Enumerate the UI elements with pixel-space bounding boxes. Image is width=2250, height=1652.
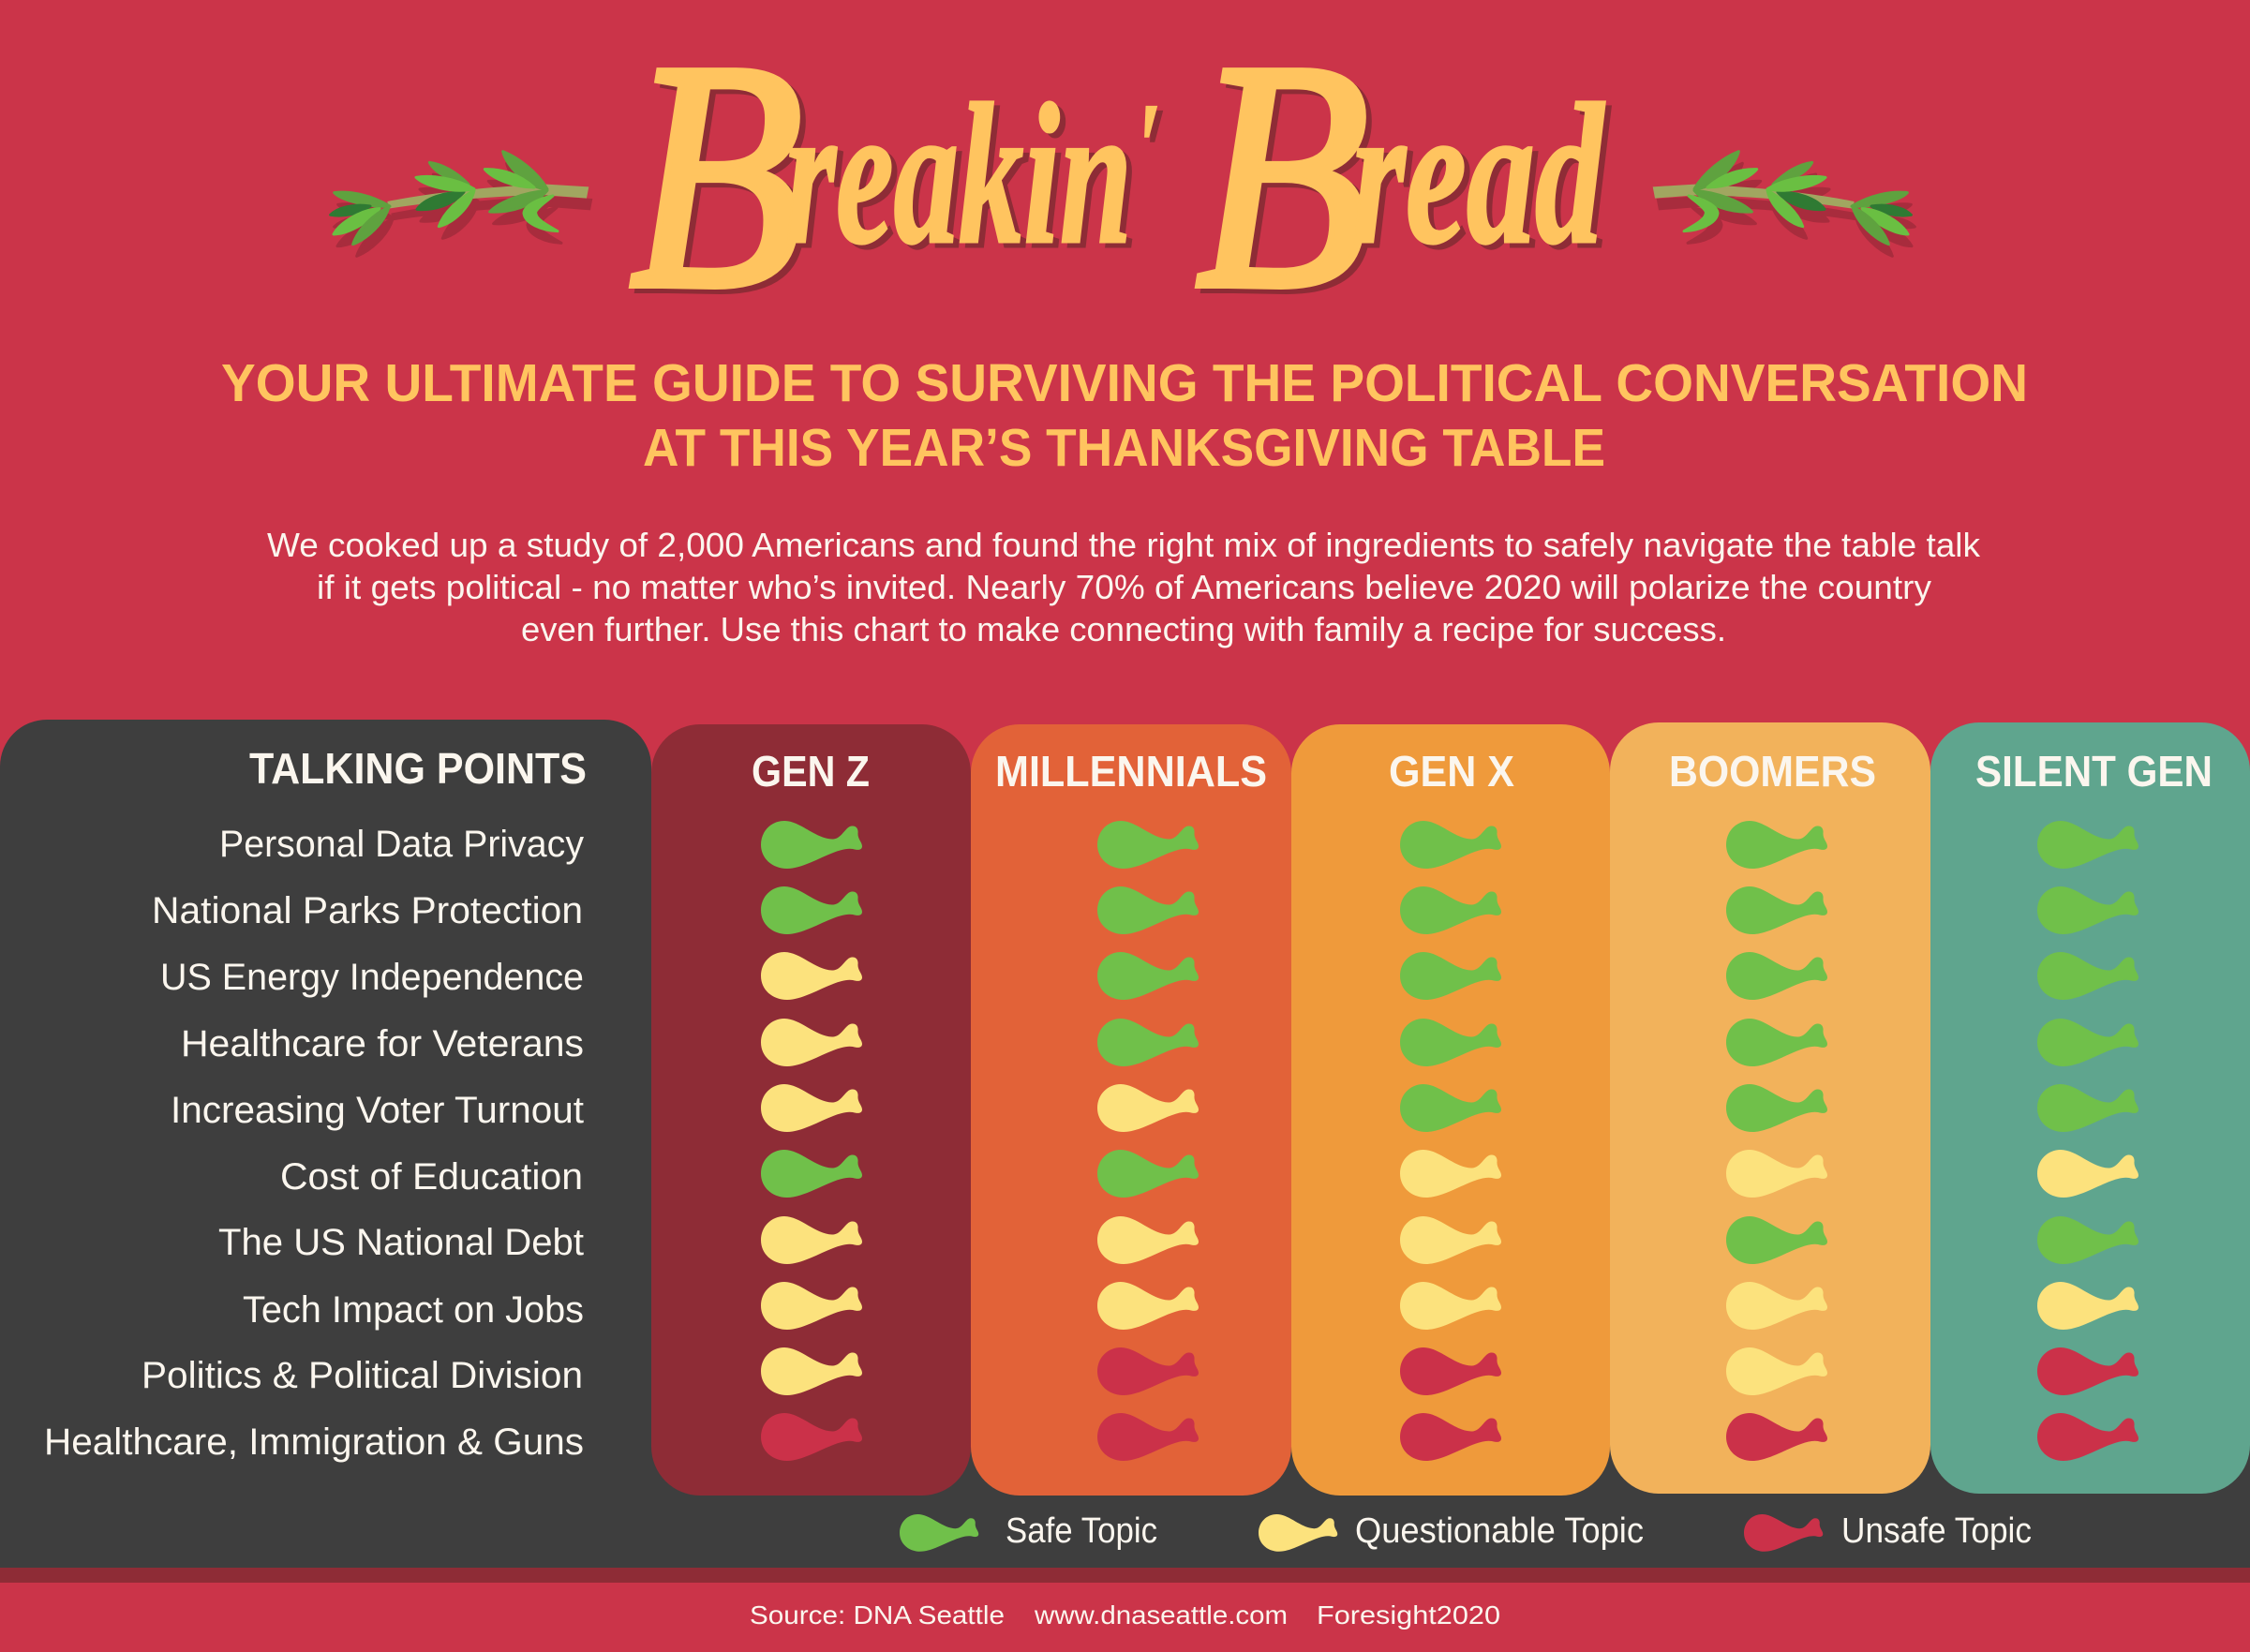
panel: talking points list — [44, 744, 587, 1463]
title: read — [1352, 62, 1605, 286]
heading: Gen X: GEN X — [1389, 747, 1514, 796]
subtitle — [221, 353, 2028, 478]
icon: unsafe topic — [1744, 1514, 1823, 1552]
icons: Gen X ratings — [1400, 821, 1501, 1461]
row label: National Parks Protection — [152, 890, 583, 931]
icons: Boomers ratings — [1726, 821, 1827, 1461]
panel: Boomers column — [1610, 722, 1930, 1494]
heading: Gen Z: GEN Z — [752, 747, 870, 796]
row label: Personal Data Privacy — [219, 824, 584, 865]
footer source line: www.dnaseattle.com — [1034, 1600, 1288, 1630]
title — [630, 0, 1605, 356]
legend label: unsafe: Unsafe Topic — [1841, 1511, 2032, 1551]
title: ' — [1131, 76, 1157, 221]
row label: Cost of Education — [280, 1156, 583, 1198]
icons: Gen Z ratings — [761, 821, 862, 1461]
panel: dark table background — [0, 720, 2250, 1568]
subtitle: AT THIS YEAR’S THANKSGIVING TABLE — [643, 418, 1605, 478]
legend label: questionable: Questionable Topic — [1355, 1511, 1644, 1551]
panel: Gen X column — [1291, 724, 1610, 1496]
icon: questionable topic — [1259, 1514, 1337, 1552]
footer source line: Source: DNA Seattle — [750, 1600, 1005, 1630]
row label: US Energy Independence — [160, 957, 584, 998]
row label: The US National Debt — [218, 1222, 584, 1263]
heading: talking points: TALKING POINTS — [249, 744, 587, 793]
row label: Politics & Political Division — [142, 1355, 583, 1396]
footer band stripe — [0, 1568, 2250, 1583]
legend — [900, 1511, 2032, 1552]
intro text block: even further. Use this chart to make connecting with family a recipe for success. — [521, 610, 1726, 648]
icon: left rosemary sprig — [331, 152, 592, 256]
footer source line: Foresight2020 — [1317, 1600, 1500, 1630]
panel: Gen Z column — [651, 724, 971, 1496]
heading: Millennials: MILLENNIALS — [995, 747, 1267, 796]
title: B — [1196, 0, 1369, 356]
title: reakin — [785, 62, 1132, 286]
title: B — [630, 0, 803, 356]
intro text block: if it gets political - no matter who’s invited. Nearly 70% of Americans believe 2020 will polarize the country — [317, 568, 1931, 606]
panel: Silent Gen column — [1930, 722, 2250, 1494]
row label: Tech Impact on Jobs — [243, 1289, 584, 1331]
icons: Silent Gen ratings — [2037, 821, 2138, 1461]
intro text block — [267, 526, 1981, 648]
subtitle: YOUR ULTIMATE GUIDE TO SURVIVING THE POLITICAL CONVERSATION — [221, 353, 2028, 413]
row label: Increasing Voter Turnout — [171, 1090, 584, 1131]
heading: Silent Gen: SILENT GEN — [1975, 747, 2213, 796]
icons: Millennials ratings — [1097, 821, 1199, 1461]
legend label: safe: Safe Topic — [1006, 1511, 1157, 1551]
icon: right rosemary sprig — [1653, 152, 1915, 256]
row label: Healthcare, Immigration & Guns — [44, 1421, 584, 1463]
heading: Boomers: BOOMERS — [1669, 747, 1876, 796]
row label: Healthcare for Veterans — [181, 1023, 584, 1064]
footer source line — [750, 1600, 1500, 1630]
panel: Millennials column — [971, 724, 1291, 1496]
icon: safe topic — [900, 1514, 978, 1552]
intro text block: We cooked up a study of 2,000 Americans and found the right mix of ingredients to safely navigate the table talk — [267, 526, 1981, 564]
